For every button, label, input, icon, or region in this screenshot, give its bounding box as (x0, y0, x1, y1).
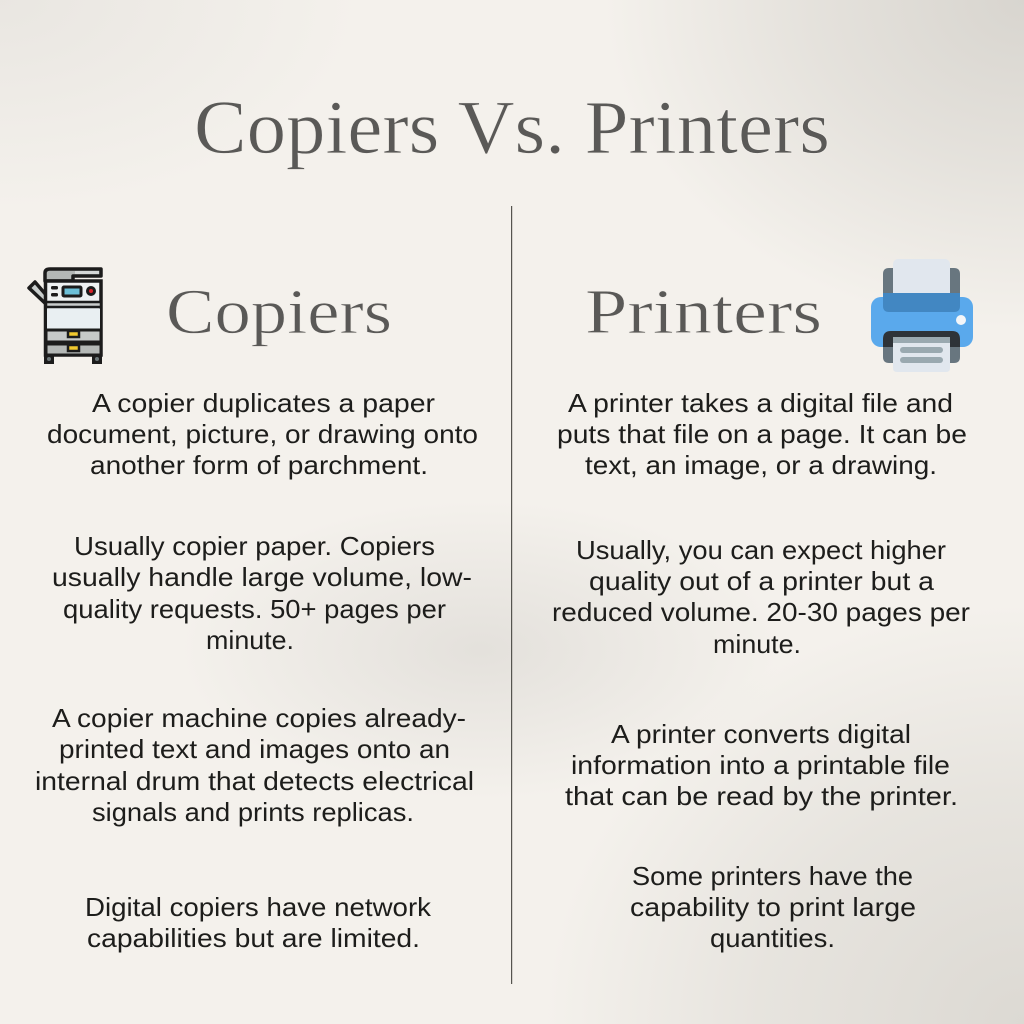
text block: how a copier works: printed text and images onto an (59, 734, 450, 764)
text block: what a copier does: A copier duplicates a paper (92, 388, 435, 418)
text block: how a copier works: signals and prints replicas. (92, 797, 414, 827)
text block: copier volume (52, 531, 472, 655)
text block: printer volume: minute. (713, 629, 801, 659)
text block: printer capability: Some printers have the (632, 861, 913, 891)
text block: printer volume (552, 535, 970, 659)
text block: printer capability: quantities. (710, 923, 835, 953)
text block: what a printer does: A printer takes a digital file and (568, 388, 953, 418)
text block: how a copier works: A copier machine copies already- (52, 703, 466, 733)
text block: what a printer does: text, an image, or a drawing. (585, 450, 937, 480)
text block: what a printer does (557, 388, 967, 480)
text block: how a copier works (35, 703, 474, 827)
text block: how a copier works: internal drum that detects electrical (35, 766, 474, 796)
text block: copier network (85, 892, 432, 953)
text block: how a printer works: A printer converts digital (611, 719, 911, 749)
center divider line (511, 206, 512, 984)
text block: copier volume: quality requests. 50+ pages per (63, 594, 446, 624)
text block: what a printer does: puts that file on a page. It can be (557, 419, 967, 449)
heading: Copiers: Copiers (166, 276, 392, 347)
text block: copier volume: usually handle large volume, low- (52, 562, 472, 592)
icon: copier machine (29, 269, 102, 364)
text block: how a printer works: that can be read by the printer. (565, 781, 958, 811)
text block: printer capability: capability to print large (630, 892, 916, 922)
text block: copier network: capabilities but are limited. (87, 923, 420, 953)
panel: printers (552, 259, 973, 953)
icon: printer (871, 259, 973, 372)
text block: printer volume: reduced volume. 20-30 pages per (552, 597, 970, 627)
text block: copier network: Digital copiers have network (85, 892, 432, 922)
title: Copiers Vs. Printers (194, 86, 830, 170)
text block: printer volume: Usually, you can expect higher (576, 535, 946, 565)
text block: copier volume: Usually copier paper. Copiers (74, 531, 435, 561)
text block: what a copier does (47, 388, 478, 480)
text block: what a copier does: another form of parchment. (90, 450, 428, 480)
text block: printer volume: quality out of a printer but a (589, 566, 935, 596)
text block: what a copier does: document, picture, or drawing onto (47, 419, 478, 449)
text block: printer capability (630, 861, 916, 953)
text block: how a printer works: information into a printable file (571, 750, 950, 780)
heading: Printers: Printers (585, 276, 822, 347)
text block: copier volume: minute. (206, 625, 294, 655)
panel: copiers (29, 269, 478, 953)
text block: how a printer works (565, 719, 958, 811)
